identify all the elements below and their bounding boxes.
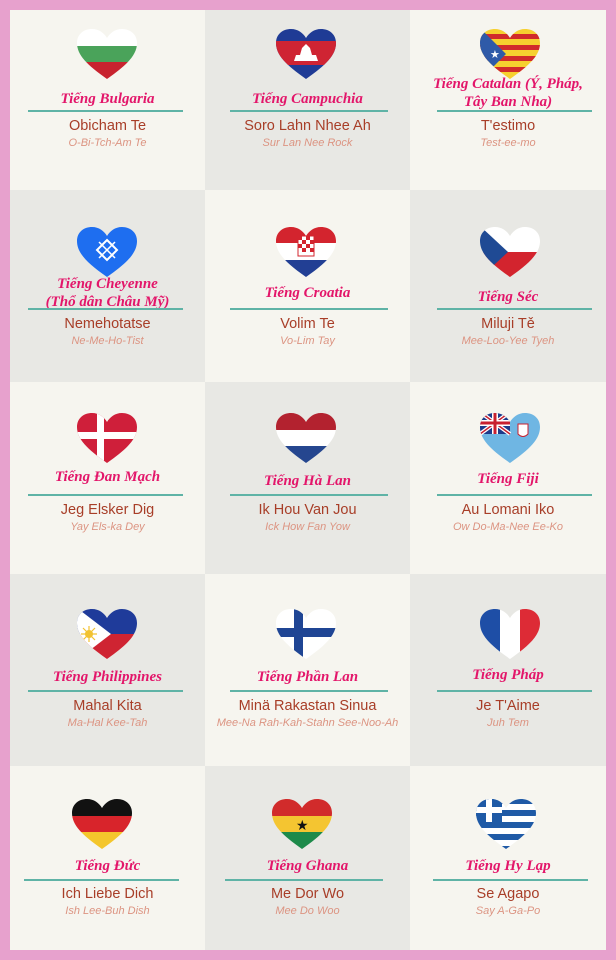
icon: Germany heart: [72, 799, 132, 849]
pronunciation: Ne-Me-Ho-Tist: [71, 335, 144, 347]
icon: Netherlands heart: [276, 413, 336, 463]
phrase: Soro Lahn Nhee Ah: [244, 118, 371, 134]
phrase: T'estimo: [481, 118, 535, 134]
title: Tiếng Catalan (Ý, Pháp,: [433, 76, 583, 92]
panel: Netherlands: [205, 382, 410, 574]
panel: Finland: [205, 574, 410, 766]
panel: Croatia: [205, 190, 410, 382]
title: Tiếng Đan Mạch: [55, 469, 160, 485]
pronunciation: Juh Tem: [487, 717, 529, 729]
pronunciation: Sur Lan Nee Rock: [263, 137, 352, 149]
phrase: Me Dor Wo: [271, 886, 344, 902]
panel: Ghana: [205, 766, 410, 950]
title: Tiếng Séc: [478, 289, 538, 305]
title: Tiếng Bulgaria: [60, 91, 155, 107]
pronunciation: Vo-Lim Tay: [280, 335, 335, 347]
title: Tây Ban Nha): [464, 94, 552, 110]
panel: Germany: [10, 766, 205, 950]
pronunciation: Ow Do-Ma-Nee Ee-Ko: [453, 521, 563, 533]
pronunciation: Say A-Ga-Po: [476, 905, 540, 917]
icon: Cheyenne heart: [77, 227, 137, 277]
title: Tiếng Hy Lạp: [465, 858, 551, 874]
icon: Catalan heart: ★: [490, 49, 500, 61]
phrase: Nemehotatse: [64, 316, 151, 332]
title: Tiếng Hà Lan: [264, 473, 351, 489]
title: Tiếng Croatia: [265, 285, 350, 301]
pronunciation: Mee Do Woo: [275, 905, 340, 917]
phrase: Minä Rakastan Sinua: [239, 698, 376, 714]
phrase: Je T'Aime: [476, 698, 540, 714]
title: [433, 75, 583, 110]
title: Tiếng Cheyenne: [57, 276, 158, 292]
icon: Czech heart: [480, 227, 540, 277]
phrase: Miluji Tě: [481, 316, 535, 332]
icon: Catalan heart: [480, 29, 540, 79]
panel: Catalan: [410, 10, 606, 190]
icon: Philippines heart: [77, 609, 137, 659]
panel: Bulgaria: [10, 10, 205, 190]
pronunciation: Ma-Hal Kee-Tah: [68, 717, 147, 729]
panel: Fiji: [410, 382, 606, 574]
phrase: Mahal Kita: [73, 698, 142, 714]
icon: France heart: [480, 609, 540, 659]
pronunciation: Ick How Fan Yow: [265, 521, 350, 533]
phrase: Obicham Te: [69, 118, 146, 134]
pronunciation: Yay Els-ka Dey: [70, 521, 145, 533]
panel: France: [410, 574, 606, 766]
panel: Greece: [410, 766, 606, 950]
icon: Ghana heart: [272, 799, 332, 849]
title: Tiếng Pháp: [472, 667, 544, 683]
phrase: Au Lomani Iko: [462, 502, 554, 518]
icon: Fiji heart: [480, 413, 540, 463]
title: Tiếng Phần Lan: [257, 669, 358, 685]
panel: Cheyenne: [10, 190, 205, 382]
phrase: Ich Liebe Dich: [62, 886, 153, 902]
pronunciation: O-Bi-Tch-Am Te: [68, 137, 147, 149]
phrase: Se Agapo: [477, 886, 539, 902]
title: Tiếng Fiji: [477, 471, 539, 487]
pronunciation: Ish Lee-Buh Dish: [65, 905, 150, 917]
icon: Cambodia heart: [276, 29, 336, 79]
pronunciation: Mee-Na Rah-Kah-Stahn See-Noo-Ah: [217, 717, 398, 729]
icon: Denmark heart: [77, 413, 137, 463]
icon: Finland heart: [276, 609, 336, 659]
title: Tiếng Ghana: [267, 858, 348, 874]
title: [46, 276, 169, 310]
panel: Czech: [410, 190, 606, 382]
title: Tiếng Campuchia: [252, 91, 363, 107]
title: Tiếng Philippines: [53, 669, 162, 685]
panel: Cambodia: [205, 10, 410, 190]
title: Tiếng Đức: [75, 858, 140, 874]
phrase: Volim Te: [280, 316, 335, 332]
panel: Philippines: [10, 574, 205, 766]
phrase: Ik Hou Van Jou: [258, 502, 357, 518]
panel: Denmark: [10, 382, 205, 574]
phrase: Jeg Elsker Dig: [61, 502, 154, 518]
icon: Bulgaria heart: [77, 29, 137, 79]
icon: Greece heart: [476, 799, 536, 849]
icon: Croatia heart: [276, 227, 336, 277]
pronunciation: Mee-Loo-Yee Tyeh: [462, 335, 554, 347]
title: (Thổ dân Châu Mỹ): [46, 294, 169, 310]
pronunciation: Test-ee-mo: [480, 137, 536, 149]
icon: Ghana heart: ★: [296, 817, 309, 833]
